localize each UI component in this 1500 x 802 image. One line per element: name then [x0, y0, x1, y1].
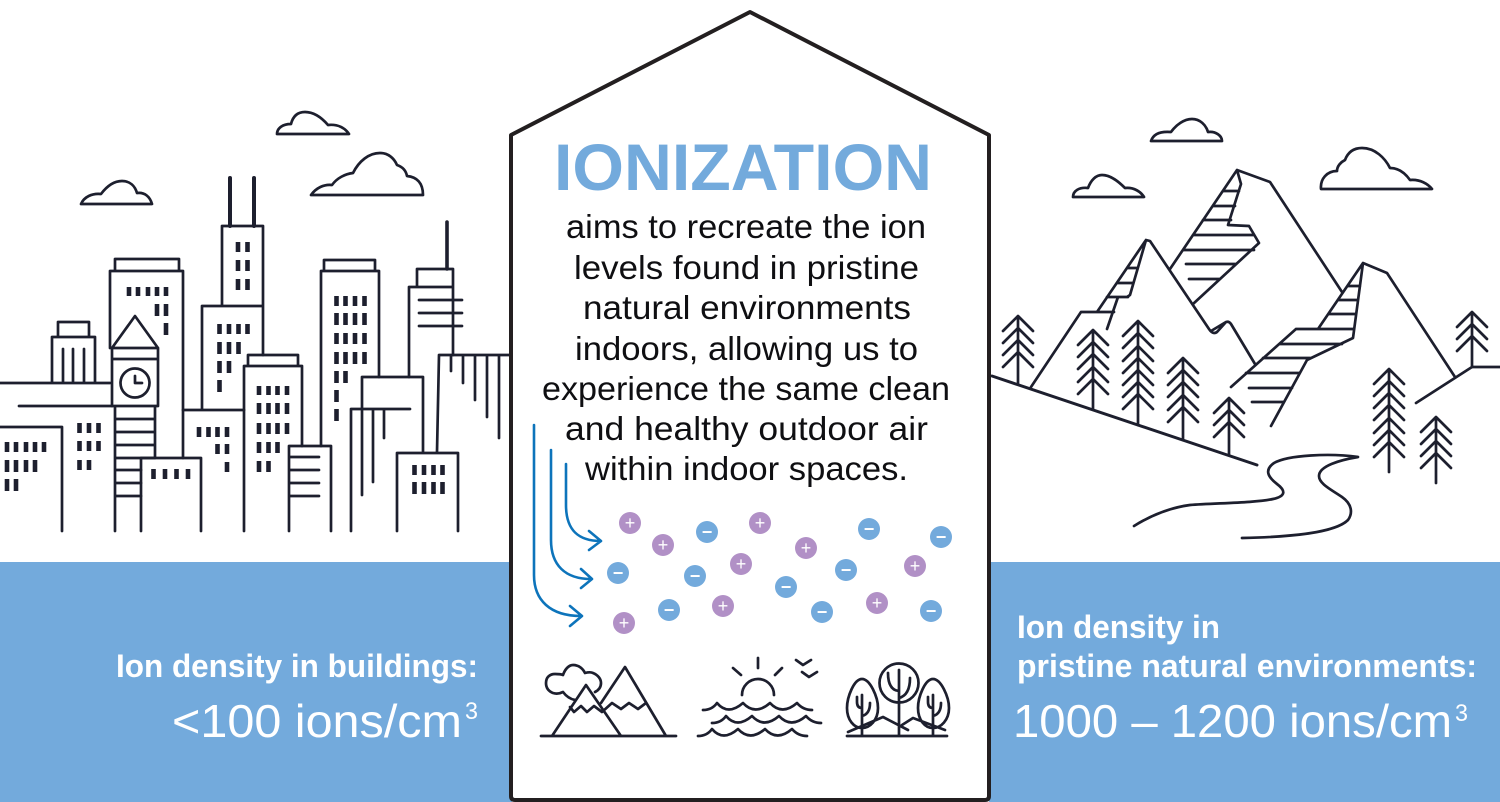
- text block: description: [542, 208, 950, 487]
- building: right tall block: [321, 260, 379, 446]
- ions: negative: −: [664, 600, 674, 620]
- arrow: lower: [534, 425, 582, 626]
- icon: pine tree 7: [1421, 417, 1451, 483]
- building: overlapping block: [351, 377, 423, 531]
- arrow: middle: [551, 450, 592, 588]
- windows: tall block: [129, 287, 166, 335]
- value: natural ion density: 3: [1455, 700, 1468, 727]
- icon: spire: [445, 222, 449, 269]
- text block: description: aims to recreate the ion: [566, 208, 926, 245]
- text block: description: levels found in pristine: [574, 249, 919, 286]
- windows: lower centre block: [199, 427, 227, 472]
- mountain: back centre: [1170, 170, 1342, 304]
- ions: positive: +: [910, 556, 920, 576]
- ions: negative: −: [841, 560, 851, 580]
- ions: positive: +: [619, 613, 629, 633]
- building: low front block: [141, 458, 201, 531]
- ions: negative: −: [817, 602, 827, 622]
- panel: blue band right: [989, 562, 1500, 802]
- panel: blue band left: [0, 562, 512, 802]
- arrows: air flow into ions: [534, 425, 601, 626]
- illustration: mountain landscape: [992, 119, 1500, 538]
- ions: negative: −: [936, 527, 946, 547]
- text block: description: natural environments: [583, 289, 911, 326]
- ions: positive: +: [658, 535, 668, 555]
- icon: cloud right low: [1073, 175, 1144, 197]
- ions: negative: −: [781, 577, 791, 597]
- arrow: upper: [566, 464, 601, 550]
- ions: negative: −: [702, 522, 712, 542]
- mountain: front left: [1031, 240, 1255, 387]
- building: antenna tower: [183, 226, 263, 410]
- ions: negative: −: [690, 566, 700, 586]
- ions: positive: +: [801, 538, 811, 558]
- ions: negative: −: [864, 519, 874, 539]
- text block: description: experience the same clean: [542, 370, 950, 407]
- ions: positive: +: [736, 554, 746, 574]
- ions: positive: +: [872, 593, 882, 613]
- building: far left block and rooftop: [0, 322, 112, 531]
- ions: positive: [613, 512, 926, 634]
- panel: house outline: [511, 12, 989, 800]
- mountain: right: [1231, 263, 1455, 426]
- windows: centre block: [259, 386, 287, 472]
- ions: negative: [607, 518, 952, 623]
- icon: pine tree 3: [1123, 321, 1153, 425]
- label: ion density in buildings: Ion density in buildings:: [116, 648, 478, 684]
- value: buildings ion density: <100 ions/cm: [172, 695, 462, 747]
- windows: left blocks: [7, 423, 98, 491]
- windows: right tall block: [336, 296, 364, 421]
- icon: cloud top: [277, 112, 349, 134]
- building: dripping rooftop: [437, 355, 510, 452]
- text block: description: indoors, allowing us to: [575, 330, 918, 367]
- value: natural ion density: 1000 – 1200 ions/cm: [1013, 695, 1452, 747]
- icon: pine tree 2: [1078, 330, 1108, 409]
- building: striped front block: [289, 446, 331, 531]
- building: front right block: [397, 453, 458, 531]
- icon: cloud small left: [81, 181, 152, 204]
- icon: pine tree 8: [1457, 312, 1487, 367]
- icon: sun over water: [698, 658, 821, 736]
- building: spire tower: [409, 269, 462, 377]
- windows: front right block: [414, 465, 442, 494]
- icon: pine tree 6: [1374, 369, 1404, 472]
- icon: cloud right large: [1321, 148, 1432, 189]
- icon: pine tree 1: [1003, 316, 1033, 384]
- value: buildings ion density: 3: [465, 698, 478, 725]
- building: centre block: [244, 355, 302, 531]
- right slope: [1416, 367, 1500, 403]
- text block: description: within indoor spaces.: [584, 450, 908, 487]
- icon: pine tree 4: [1168, 358, 1198, 440]
- hillside slope: [992, 376, 1257, 465]
- icon: pine tree 5: [1214, 398, 1244, 455]
- windows: low front block: [154, 469, 188, 479]
- label: ion density in pristine natural environments: Ion density in: [1017, 609, 1220, 645]
- icon: cloud large: [311, 153, 423, 195]
- windows: antenna tower: [220, 242, 248, 392]
- icon: mountains with cloud: [541, 665, 676, 736]
- ions: positive: +: [755, 513, 765, 533]
- text block: description: and healthy outdoor air: [565, 410, 928, 447]
- icon: twin antennas: [230, 178, 254, 226]
- ions: negative: −: [926, 601, 936, 621]
- ions: positive: +: [625, 513, 635, 533]
- heading: IONIZATION: IONIZATION: [554, 130, 932, 204]
- icon: cloud right small: [1151, 119, 1222, 141]
- illustration: city skyline: [0, 112, 510, 531]
- ions: negative: −: [613, 563, 623, 583]
- building: tall block behind clock tower: [110, 259, 183, 458]
- label: ion density in pristine natural environments: pristine natural environments:: [1017, 648, 1477, 684]
- icon: river: [1134, 455, 1358, 538]
- ions: positive: +: [718, 596, 728, 616]
- icon: trees: [847, 664, 949, 736]
- icon: clock tower: [112, 316, 158, 531]
- label: ion density in pristine natural environments: [1017, 609, 1477, 684]
